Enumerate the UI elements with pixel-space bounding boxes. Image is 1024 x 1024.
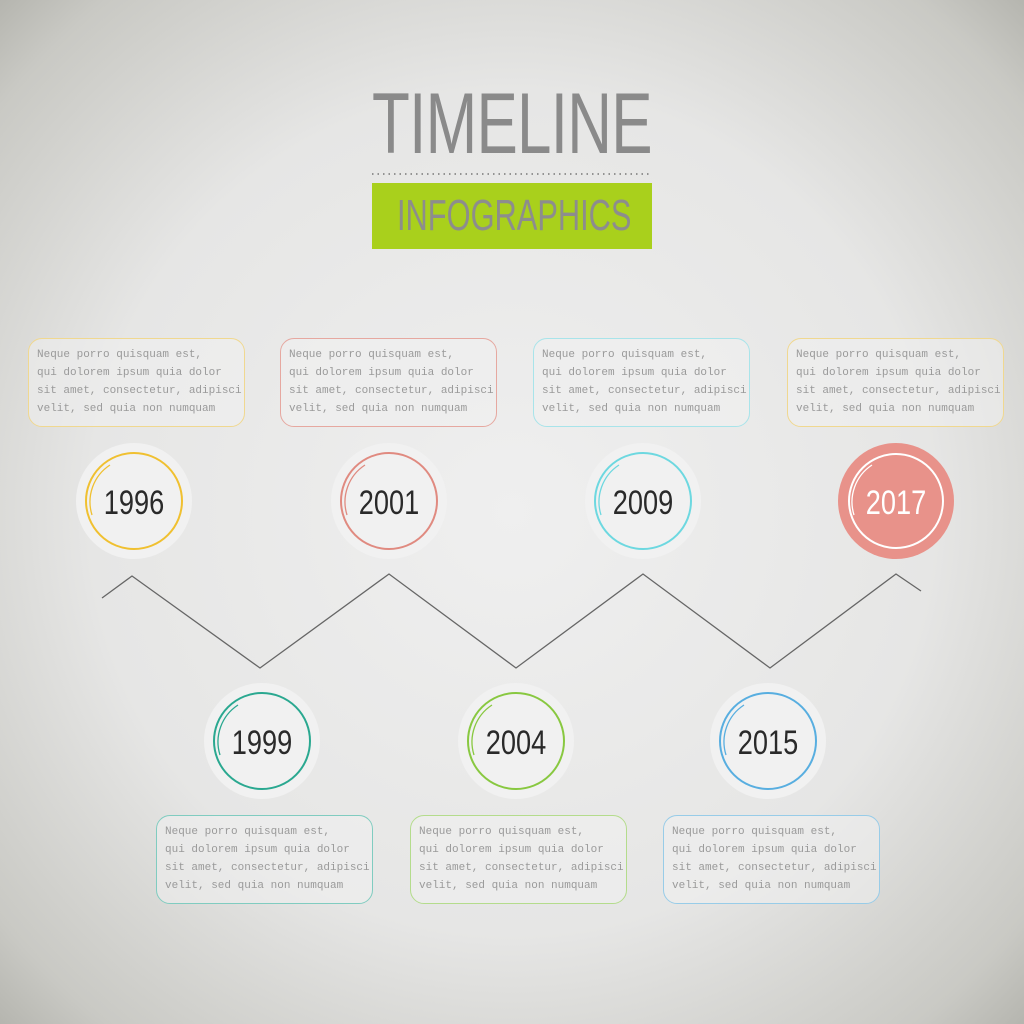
text box 1999: sit amet, consectetur, adipisci	[165, 862, 370, 874]
text box 1996	[28, 338, 245, 427]
text box 2004	[410, 815, 627, 904]
year circle 1996: 1996	[104, 483, 164, 522]
text box 2017	[787, 338, 1004, 427]
text box 2009: velit, sed quia non numquam	[542, 403, 720, 415]
text box 1999: Neque porro quisquam est,	[165, 826, 330, 838]
text box 1999: qui dolorem ipsum quia dolor	[165, 844, 350, 856]
text box 2017: sit amet, consectetur, adipisci	[796, 385, 1001, 397]
year circle 2015	[710, 683, 826, 799]
subtitle banner: INFOGRAPHICS	[397, 191, 631, 240]
text box 1999	[156, 815, 373, 904]
text box 1996: qui dolorem ipsum quia dolor	[37, 367, 222, 379]
year circle 2004: 2004	[486, 723, 546, 762]
text box 2009: qui dolorem ipsum quia dolor	[542, 367, 727, 379]
year circle 1999: 1999	[232, 723, 292, 762]
text box 2004: sit amet, consectetur, adipisci	[419, 862, 624, 874]
year circle 2004	[458, 683, 574, 799]
text box 2001: sit amet, consectetur, adipisci	[289, 385, 494, 397]
text box 2015: Neque porro quisquam est,	[672, 826, 837, 838]
year circle 2009: 2009	[613, 483, 673, 522]
text box 2001: qui dolorem ipsum quia dolor	[289, 367, 474, 379]
text box 1999: velit, sed quia non numquam	[165, 880, 343, 892]
year circle 1999	[204, 683, 320, 799]
text box 1996: velit, sed quia non numquam	[37, 403, 215, 415]
year circle 2009	[585, 443, 701, 559]
year circle 2001	[331, 443, 447, 559]
text box 2001: Neque porro quisquam est,	[289, 349, 454, 361]
text box 2009	[533, 338, 750, 427]
text box 2004: qui dolorem ipsum quia dolor	[419, 844, 604, 856]
text box 2001: velit, sed quia non numquam	[289, 403, 467, 415]
text box 2009: Neque porro quisquam est,	[542, 349, 707, 361]
year circle 1996	[76, 443, 192, 559]
text box 2001	[280, 338, 497, 427]
subtitle banner	[372, 183, 652, 249]
text box 2004: velit, sed quia non numquam	[419, 880, 597, 892]
year circle 2001: 2001	[359, 483, 419, 522]
year circle 2017 highlighted: 2017	[866, 483, 926, 522]
text box 2004: Neque porro quisquam est,	[419, 826, 584, 838]
title: TIMELINE	[372, 76, 652, 172]
text box 2015: qui dolorem ipsum quia dolor	[672, 844, 857, 856]
year circle 2015: 2015	[738, 723, 798, 762]
text box 1996: sit amet, consectetur, adipisci	[37, 385, 242, 397]
text box 1996: Neque porro quisquam est,	[37, 349, 202, 361]
zigzag line	[102, 574, 921, 668]
text box 2015: sit amet, consectetur, adipisci	[672, 862, 877, 874]
text box 2017: Neque porro quisquam est,	[796, 349, 961, 361]
text box 2017: velit, sed quia non numquam	[796, 403, 974, 415]
text box 2015: velit, sed quia non numquam	[672, 880, 850, 892]
text box 2009: sit amet, consectetur, adipisci	[542, 385, 747, 397]
year circle 2017 highlighted	[838, 443, 954, 559]
text box 2017: qui dolorem ipsum quia dolor	[796, 367, 981, 379]
text box 2015	[663, 815, 880, 904]
